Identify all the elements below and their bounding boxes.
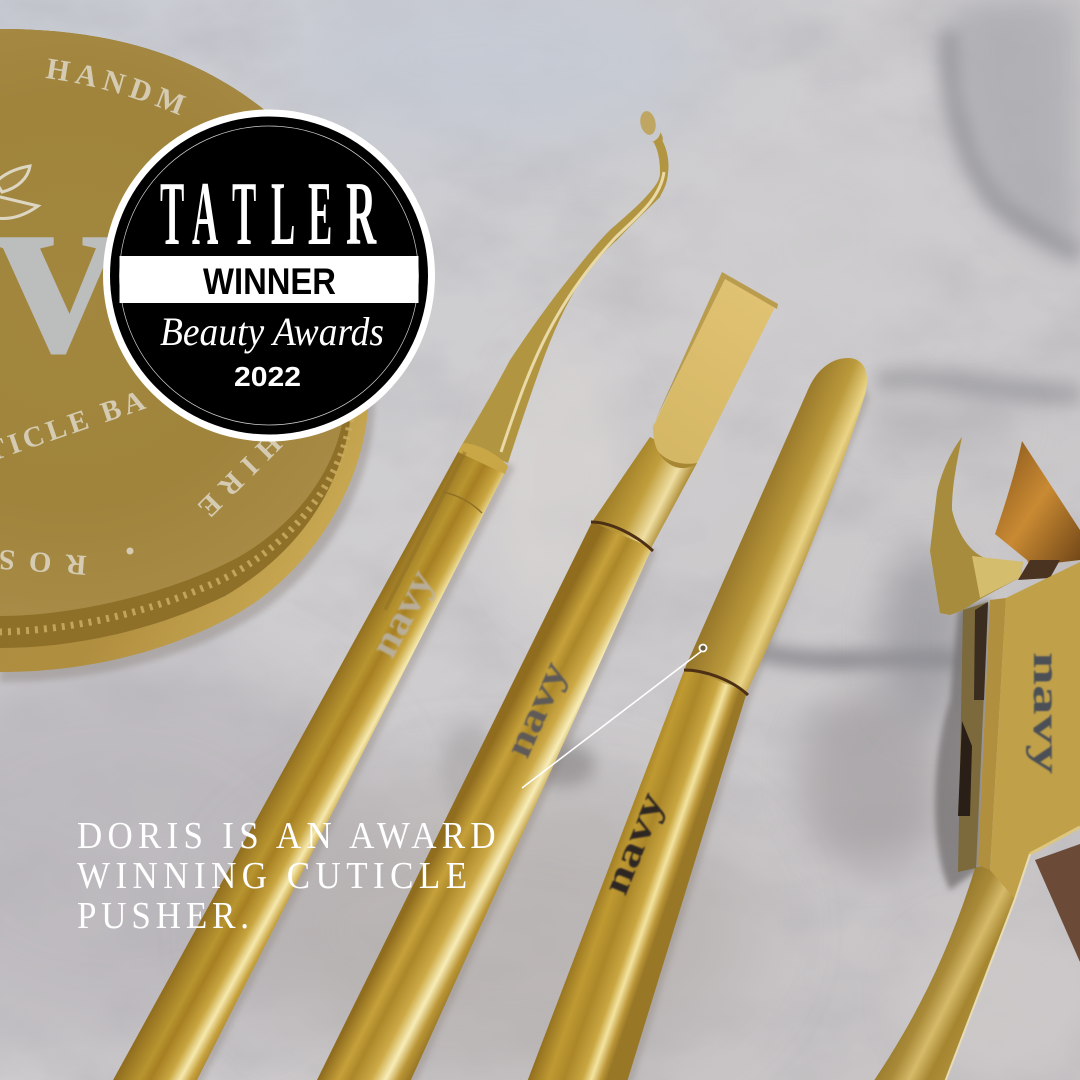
caption text: DORIS IS AN AWARD (77, 814, 496, 856)
badge black disc (110, 116, 428, 434)
nipper grip (873, 866, 1016, 1080)
badge TATLER wordmark (160, 163, 377, 265)
rounded band (684, 670, 748, 695)
badge TATLER wordmark: T (232, 163, 256, 264)
hook head (638, 110, 658, 136)
rounded handle (527, 668, 747, 1080)
nipper slot (958, 721, 972, 816)
tin rim (0, 29, 368, 672)
hook neck highlight (501, 172, 664, 452)
centre right veining (760, 652, 960, 660)
tool: flat cuticle pusher (316, 272, 778, 1080)
tool: cuticle nippers (873, 437, 1080, 1080)
badge Beauty Awards label: Beauty Awards (160, 309, 384, 354)
caption text: WINNING CUTICLE (77, 854, 467, 896)
badge TATLER wordmark: T (160, 163, 184, 264)
badge TATLER wordmark: R (346, 164, 377, 265)
badge white band (120, 256, 418, 303)
pusher collar (592, 437, 697, 550)
badge TATLER wordmark: A (192, 163, 218, 264)
tin lower lettering (0, 383, 288, 581)
hook neck (463, 137, 669, 463)
right jaw (995, 441, 1080, 566)
tin leaf icon (0, 166, 38, 218)
caption text (77, 814, 496, 936)
navy logo, faded: navy (360, 562, 443, 664)
tin lid face (0, 29, 345, 616)
pusher blade (653, 277, 777, 466)
badge WINNER label: WINNER (203, 261, 336, 302)
navy logo on nipper: navy (1025, 652, 1067, 774)
top right veining (950, 0, 1080, 260)
callout line (522, 644, 706, 788)
rounded tip (685, 358, 867, 692)
nipper body (990, 562, 1080, 899)
left jaw (930, 437, 1023, 615)
award badge (103, 110, 435, 442)
tool: rounded pusher (527, 358, 870, 1080)
badge year: 2022 (234, 361, 301, 392)
pusher band (591, 522, 653, 551)
tin of cuticle balm (0, 29, 376, 684)
caption text: PUSHER. (77, 894, 249, 936)
tin knurled band (0, 29, 353, 648)
nipper inner strip (958, 602, 988, 872)
badge TATLER wordmark: L (271, 163, 295, 264)
lower dark handle (1035, 844, 1080, 962)
ferrule and handle (112, 443, 508, 1080)
badge white ring (103, 110, 435, 442)
pusher handle (316, 522, 652, 1080)
tin shadow (0, 40, 374, 682)
tool: hooked cuticle tool (112, 110, 669, 1080)
tin lower lettering: HIRE (184, 427, 288, 530)
badge TATLER wordmark: E (308, 163, 332, 264)
callout marker (700, 644, 706, 652)
navy logo: navy (497, 655, 576, 764)
tin of cuticle balm: HANDM (46, 58, 186, 116)
navy logo: navy (594, 786, 673, 900)
tin engraved text on arc (45, 78, 222, 134)
